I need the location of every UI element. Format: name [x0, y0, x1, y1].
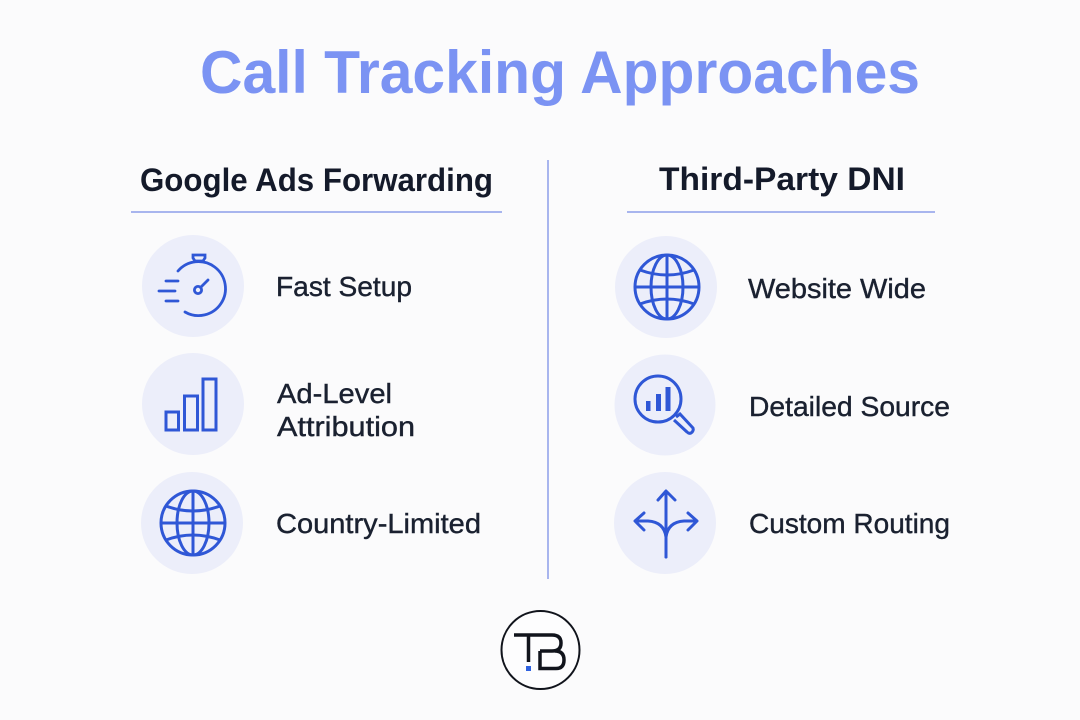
label: Website Wide: Website Wide	[748, 273, 926, 304]
label: Country-Limited: Country-Limited	[276, 508, 481, 539]
logo: TB	[502, 611, 580, 689]
label: Ad-Level Attribution	[277, 378, 415, 442]
label: Fast Setup: Fast Setup	[276, 271, 412, 302]
heading: Third-Party DNI: Third-Party DNI	[659, 161, 905, 197]
icon: magnifier with bars	[614, 354, 716, 456]
icon: globe	[615, 236, 717, 338]
icon: stopwatch	[142, 235, 244, 337]
heading: Google Ads Forwarding: Google Ads Forwarding	[140, 162, 493, 198]
icon: globe	[141, 472, 243, 574]
label: Custom Routing: Custom Routing	[749, 508, 950, 539]
panel: Third-Party DNI	[614, 161, 950, 574]
label: Ad-Level Attribution: Ad-Level	[277, 378, 392, 409]
panel: Google Ads Forwarding	[131, 162, 502, 574]
label: Ad-Level Attribution: Attribution	[277, 411, 415, 442]
title: Call Tracking Approaches	[200, 39, 920, 106]
label: Detailed Source: Detailed Source	[749, 391, 950, 422]
icon: branching arrows	[614, 472, 716, 574]
icon: bar chart	[142, 353, 244, 455]
